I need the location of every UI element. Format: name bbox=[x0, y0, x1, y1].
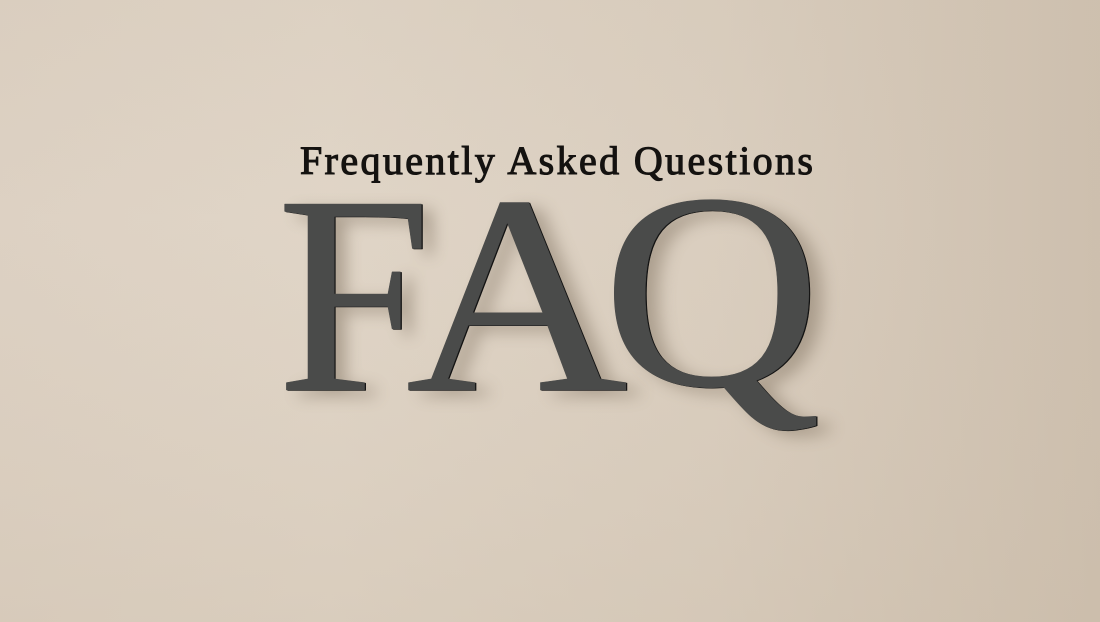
letter Q: Q bbox=[603, 137, 822, 447]
large FAQ lettering bbox=[277, 136, 834, 458]
letter Q: Q bbox=[602, 137, 821, 446]
letter A: A bbox=[406, 138, 628, 452]
letter F: F bbox=[288, 142, 443, 458]
letter A: A bbox=[407, 138, 629, 453]
letter A: A bbox=[419, 144, 641, 458]
letter Q: Q bbox=[615, 143, 834, 452]
letter F: F bbox=[277, 136, 431, 452]
subtitle: Frequently Asked Questions: Frequently Asked Questions bbox=[300, 138, 813, 183]
letter F: F bbox=[278, 137, 433, 452]
